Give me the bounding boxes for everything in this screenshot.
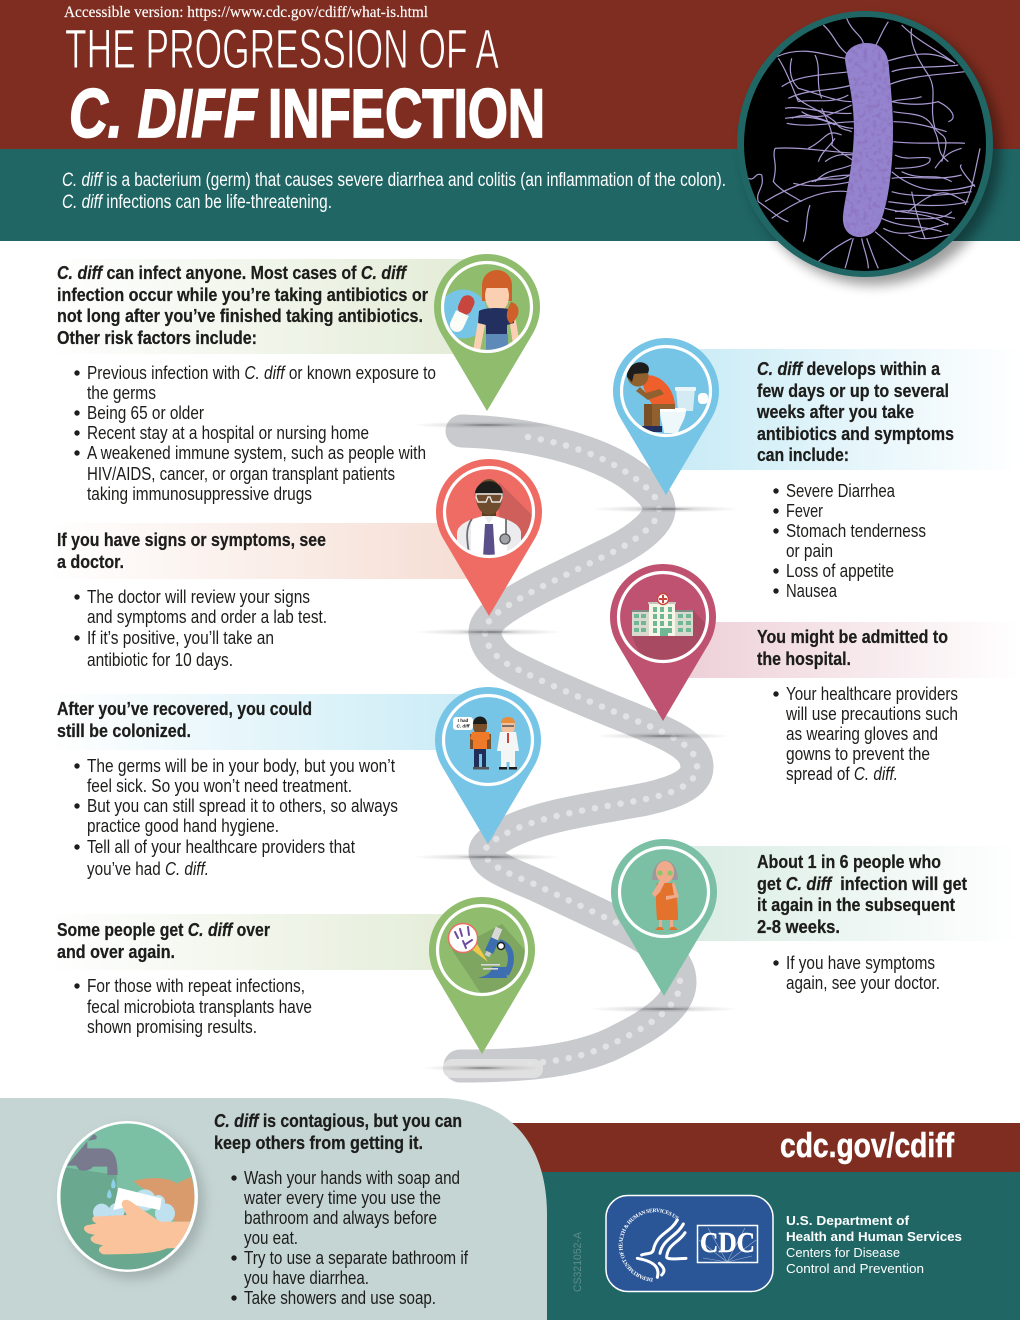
list: hospital: gowns to prevent the xyxy=(786,744,930,764)
text block: see a doctor: If you have signs or symptoms, see xyxy=(57,530,326,550)
text block: colonized: After you’ve recovered, you could xyxy=(57,699,312,719)
text block: symptoms develop: C. diff develops within a xyxy=(757,359,941,379)
list: symptoms: Loss of appetite xyxy=(786,561,894,581)
icon: hand washing xyxy=(50,1115,210,1280)
list: 1 in 6: again, see your doctor. xyxy=(786,973,940,993)
list: risk factors: HIV/AIDS, cancer, or organ transplant patients xyxy=(87,464,395,484)
pin: hospital xyxy=(610,564,718,721)
list: 1 in 6 xyxy=(773,953,940,993)
list: prevention: bathroom and always before xyxy=(244,1208,437,1228)
list: repeat infection: shown promising results. xyxy=(87,1017,257,1037)
agency text: Control and Prevention xyxy=(786,1261,924,1276)
intro text: C. diff is a bacterium (germ) that causes severe diarrhea and colitis (an inflammation of the colon). xyxy=(62,170,726,191)
text block: hospital: the hospital. xyxy=(757,649,851,669)
pin: colonized, patient and doctor: C. diff xyxy=(457,724,470,728)
list: risk factors: Recent stay at a hospital or nursing home xyxy=(87,423,369,443)
pin: risk, woman with antibiotic xyxy=(434,254,540,411)
text block: contagious xyxy=(214,1111,462,1153)
list: repeat infection: fecal microbiota transplants have xyxy=(87,997,312,1017)
list: symptoms: or pain xyxy=(786,541,833,561)
text block: repeat infection: Some people get C. diff over xyxy=(57,920,270,940)
text block: symptoms develop: few days or up to several xyxy=(757,381,949,401)
list: prevention: you eat. xyxy=(244,1228,298,1248)
list: colonized: The germs will be in your body, but you won’t xyxy=(87,756,395,776)
text block: C. diff can infect anyone xyxy=(57,263,428,348)
agency text xyxy=(786,1213,962,1276)
list: symptoms: Fever xyxy=(786,501,823,521)
list: symptoms: Stomach tenderness xyxy=(786,521,926,541)
pin: colonized, patient and doctor: I had xyxy=(458,718,469,723)
list: prevention: you have diarrhea. xyxy=(244,1268,369,1288)
logo: HHS and CDC xyxy=(605,1194,774,1292)
text block: symptoms develop: can include: xyxy=(757,445,849,465)
text block: repeat infection: and over again. xyxy=(57,942,175,962)
footer band: red url strip xyxy=(500,1123,1020,1172)
text block: symptoms develop: weeks after you take xyxy=(756,402,914,422)
title: THE PROGRESSION OF A xyxy=(65,17,499,80)
text block: C. diff can infect anyone: not long after you’ve finished taking antibiotics. xyxy=(57,306,423,326)
text block: hospital xyxy=(757,627,948,669)
list: risk factors: A weakened immune system, such as people with xyxy=(87,443,426,463)
text block: C. diff can infect anyone: infection occur while you’re taking antibiotics or xyxy=(57,285,428,305)
text block: hospital: You might be admitted to xyxy=(757,627,948,647)
text block: symptoms develop xyxy=(756,359,954,465)
text block: see a doctor: a doctor. xyxy=(57,552,124,572)
text block: 1 in 6: About 1 in 6 people who xyxy=(757,852,941,872)
list: colonized: practice good hand hygiene. xyxy=(87,816,279,836)
text block: contagious: C. diff is contagious, but you can xyxy=(214,1111,462,1131)
footer band: teal xyxy=(530,1172,1020,1320)
agency text: U.S. Department of xyxy=(786,1213,910,1228)
panel: contagious prevention xyxy=(0,1098,547,1320)
text block: 1 in 6 xyxy=(757,852,967,937)
list: colonized xyxy=(74,756,398,879)
winding road path xyxy=(412,422,741,1078)
logo: HHS and CDC: DEPARTMENT OF HEALTH & HUMAN SERVICES USA xyxy=(618,1208,679,1282)
list: doctor xyxy=(74,587,327,670)
list: prevention: Take showers and use soap. xyxy=(244,1288,436,1308)
header band: intro background xyxy=(0,149,1020,241)
list: risk factors xyxy=(74,363,436,504)
list: doctor: antibiotic for 10 days. xyxy=(87,650,233,670)
text block: see a doctor xyxy=(57,530,326,572)
logo: HHS and CDC: CDC xyxy=(700,1227,755,1259)
list: risk factors: Previous infection with C. diff or known exposure to xyxy=(87,363,436,383)
publication code: CS321052-A xyxy=(572,1231,584,1292)
pin: doctor xyxy=(436,459,549,616)
intro text xyxy=(62,170,726,213)
title: C. DIFF xyxy=(69,75,258,152)
pin: microscope xyxy=(429,897,542,1054)
image: C. diff bacterium in circle xyxy=(737,11,1001,285)
list: risk factors: taking immunosuppressive drugs xyxy=(87,484,312,504)
list: doctor: If it’s positive, you’ll take an xyxy=(87,628,274,648)
list: colonized: feel sick. So you won’t need treatment. xyxy=(87,776,352,796)
list: repeat infection: For those with repeat infections, xyxy=(87,976,305,996)
list: hospital: spread of C. diff. xyxy=(786,764,898,784)
text block: repeat infection xyxy=(57,920,270,962)
panel bands xyxy=(0,259,1020,970)
intro text: C. diff infections can be life-threatening. xyxy=(62,192,332,213)
list: doctor: and symptoms and order a lab test. xyxy=(87,607,327,627)
url: cdc.gov/cdiff xyxy=(780,1127,955,1165)
text block: 1 in 6: get C. diff infection will get xyxy=(757,874,967,894)
list: prevention: Try to use a separate bathroom if xyxy=(244,1248,469,1268)
list: hospital: as wearing gloves and xyxy=(786,724,938,744)
text block: C. diff can infect anyone: Other risk factors include: xyxy=(57,328,257,348)
agency text: Health and Human Services xyxy=(786,1229,962,1244)
list: symptoms: Nausea xyxy=(786,581,838,601)
text block: colonized xyxy=(57,699,312,741)
text block: 1 in 6: it again in the subsequent xyxy=(757,895,955,915)
list: prevention xyxy=(231,1168,469,1308)
text block: contagious: keep others from getting it. xyxy=(214,1133,423,1153)
list: 1 in 6: If you have symptoms xyxy=(786,953,935,973)
list: repeat infection xyxy=(74,976,312,1037)
pin: colonized, patient and doctor xyxy=(435,687,541,844)
list: hospital: will use precautions such xyxy=(785,704,958,724)
text block: 1 in 6: 2-8 weeks. xyxy=(757,917,840,937)
list: doctor: The doctor will review your signs xyxy=(87,587,310,607)
list: colonized: you’ve had C. diff. xyxy=(87,859,209,879)
pin: symptoms, man on toilet xyxy=(613,338,719,495)
pin: recurrence, sick woman xyxy=(611,839,717,996)
list: colonized: But you can still spread it to others, so always xyxy=(87,796,398,816)
text block: symptoms develop: antibiotics and symptoms xyxy=(757,424,954,444)
list: risk factors: Being 65 or older xyxy=(87,403,204,423)
accessible version link: Accessible version: https://www.cdc.gov/cdiff/what-is.html xyxy=(64,4,429,21)
agency text: Centers for Disease xyxy=(786,1245,900,1260)
list: colonized: Tell all of your healthcare providers that xyxy=(87,837,355,857)
list: hospital: Your healthcare providers xyxy=(786,684,958,704)
list: hospital xyxy=(773,684,958,784)
list: symptoms: Severe Diarrhea xyxy=(786,481,896,501)
list: prevention: water every time you use the xyxy=(243,1188,441,1208)
text block: C. diff can infect anyone: C. diff can infect anyone. Most cases of C. diff xyxy=(57,263,408,283)
list: prevention: Wash your hands with soap and xyxy=(244,1168,460,1188)
header band: title background xyxy=(0,0,1020,149)
text block: colonized: still be colonized. xyxy=(57,721,191,741)
list: symptoms xyxy=(773,481,926,601)
title: INFECTION xyxy=(268,75,545,152)
list: risk factors: the germs xyxy=(87,383,156,403)
title xyxy=(65,17,545,152)
